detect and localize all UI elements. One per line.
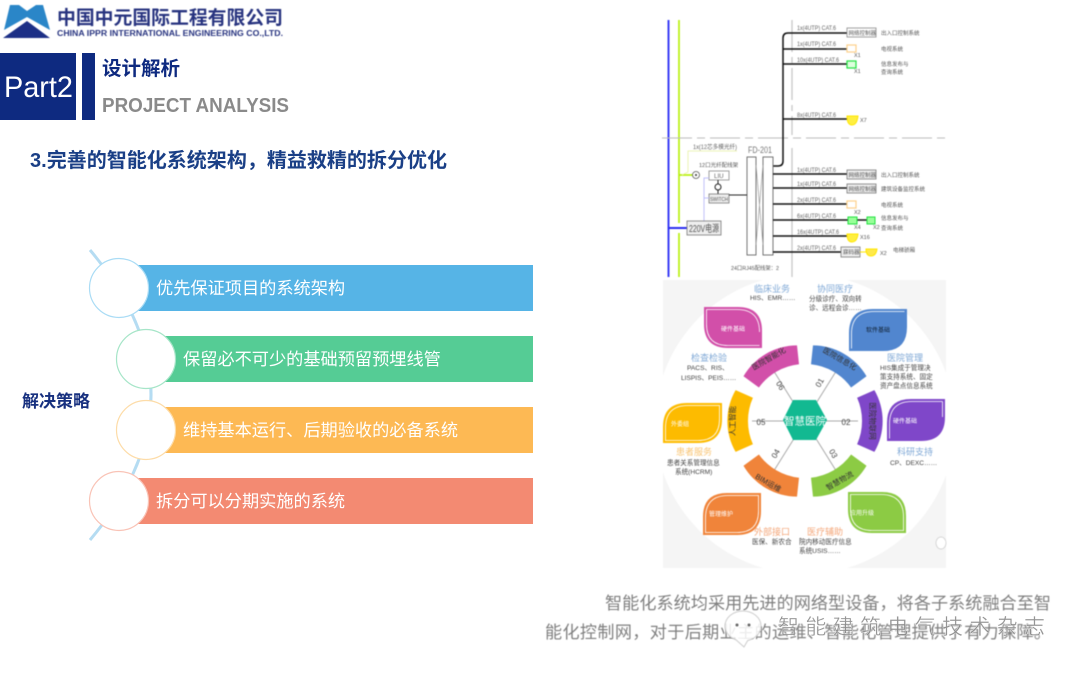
section badge: Part2 [0,53,95,120]
label: examination: LISPIS、PEIS…… [681,375,736,382]
leaf: management maintenance (orange): 管理维护 [709,510,733,518]
leaf: hardware base (magenta): 硬件基础 [721,325,745,333]
lower floor branch lines: 16x(4UTP) CAT.6 [797,229,839,236]
upper floor branch lines: X7 [860,118,867,124]
strategy item 3 [116,400,533,460]
label: hospital management: 资产盘点信息系统 [880,381,933,390]
lower floor branch lines: 电梯骄厢 [893,246,916,254]
lower floor branch lines: 电视系统 [881,201,904,209]
segment: artificial intelligence [727,390,753,452]
lower floor branch lines: 1x(4UTP) CAT.6 [797,167,836,174]
fibre, LIU, switch and power: LIU [714,173,724,180]
lower floor branch lines: X2 [854,210,861,216]
label: clinical business: 临床业务 [754,283,790,294]
leaf: maintenance (yellow) [663,403,722,443]
upper floor branch lines: 网络控制器 [848,29,877,37]
lower floor branch lines: X2 [873,225,880,231]
CAD riser diagram [662,20,946,277]
label: external interface: 外部接口 [754,526,790,537]
icon: small chat bubble [936,537,946,549]
upper floor branch lines: 查询系统 [881,68,904,76]
leaf: hardware base (purple) [887,399,945,441]
watermark: journal name: 智能建筑电气技术杂志 [778,616,1045,639]
label: hospital management: 医院管理 [887,352,923,363]
distribution frame FD-201 [731,145,779,272]
label: collaborative medicine: 协同医疗 [817,283,853,294]
upper floor branch lines: X1 [854,53,861,59]
label: examination [681,352,736,382]
label: research support: CP、DEXC…… [890,460,937,467]
lower floor branch lines: 建筑设备监控系统 [881,185,926,193]
lower floor branch lines: 网络控制器 [848,171,877,179]
label: research support [890,446,937,467]
label: clinical business: HIS、EMR…… [750,295,795,302]
logo English name: CHINA IPPR INTERNATIONAL ENGINEERING CO.,LTD. [57,28,283,38]
label: strategy: 解决策略 [22,391,90,411]
lower floor branch lines: 6x(4UTP) CAT.6 [797,213,836,220]
label: medical assistance [799,526,852,555]
leaf: software base (blue): 软件基础 [866,326,890,334]
upper floor branch lines: 1x(4UTP) CAT.6 [797,41,836,48]
leaf: software base (blue) [849,309,907,351]
description text: 智能化系统均采用先进的网络型设备，将各子系统融合至智 [605,594,1051,613]
center hexagon: 智慧医院 [784,414,826,428]
strategy item 2 [116,330,533,388]
fibre, LIU, switch and power: 1x(12芯多模光纤) [693,143,737,151]
lower floor branch lines: 信息发布与 [881,214,909,222]
fibre, LIU, switch and power: 12口光纤配线架 [699,161,739,169]
lower floor branch lines: 2x(4UTP) CAT.6 [797,245,836,252]
section title: Chinese: 设计解析 [102,58,180,80]
lower floor branch lines: X2 [880,251,887,257]
lower floor branch lines: 查询系统 [881,224,904,232]
heading: 3.完善的智能化系统架构，精益救精的拆分优化 [30,148,447,172]
leaf: hardware base (purple): 硬件基础 [893,417,917,425]
label: examination: PACS、RIS、 [687,365,729,372]
lower floor branch lines: 寐码器 [843,248,860,256]
lower floor branch lines: X16 [860,235,870,241]
distribution frame FD-201: FD-201 [748,145,772,155]
icon: logo mountain mark [3,5,50,38]
label: hospital management: 策支持系统、固定 [880,372,933,381]
leaf: application upgrade (green) [848,492,906,533]
segment: smart logistics [811,454,866,497]
logo: China IPPR [3,5,283,38]
segment: hospital informatization [811,345,866,388]
segment: hospital IoT [857,390,883,452]
strategy list [90,250,533,540]
label: medical assistance: 医疗辅助 [807,526,843,537]
spoke numbers [757,376,851,460]
segment: hospital IoT: 医院物联网 [868,402,878,440]
spoke numbers: 02 [842,418,851,427]
lower floor branch lines: 1x(4UTP) CAT.6 [797,181,836,188]
hub background [664,280,946,568]
fibre, LIU, switch and power: SWITCH [710,197,728,203]
strategy item 4 [90,472,533,530]
label: collaborative medicine: 诊、远程会诊…… [809,303,862,312]
grounding and power risers [662,20,946,277]
leaf: hardware base (magenta) [704,307,762,348]
description text: 能化控制网，对于后期业主的运维、智能化管理提供了有力保障。 [545,623,1051,642]
lower floor branch lines: 网络控制器 [848,185,877,193]
spoke numbers: 06 [774,380,787,392]
label: collaborative medicine [809,283,862,312]
segment: artificial intelligence: 人工智能 [727,406,737,436]
upper floor branch lines: 8x(4UTP) CAT.6 [797,112,836,119]
leaf: maintenance (yellow): 外委组 [671,420,689,428]
upper floor branch lines: 电视系统 [881,45,904,53]
spoke numbers: 03 [827,448,840,460]
lower floor branch lines: 出入口控制系统 [881,171,920,179]
segment: hospital intelligence [744,344,799,388]
label: external interface: 医保、新农合 [752,537,792,546]
section badge: Part2: Part2 [4,71,73,104]
strategy item 1: 优先保证项目的系统架构 [156,278,345,298]
label: examination: 检查检验 [691,352,727,363]
label: medical assistance: 院内移动医疗信息 [799,537,852,546]
upper floor branch lines: 1x(4UTP) CAT.6 [797,25,836,32]
spoke numbers: 01 [814,376,826,389]
label: external interface [752,526,792,546]
strategy item 2: 保留必不可少的基础预留预埋线管 [183,349,441,369]
upper floor branch lines: X1 [854,69,861,75]
smart hospital hub diagram [655,274,955,574]
spokes [752,365,858,477]
distribution frame FD-201: 24口RJ45配线架：2 [731,264,779,272]
label: clinical business [750,283,795,302]
lower floor branch lines [773,167,926,257]
center hexagon [783,400,827,440]
fibre, LIU, switch and power [682,143,747,235]
leaf: management maintenance (orange) [703,493,761,535]
label: medical assistance: 系统USIS…… [799,546,841,555]
logo Chinese name: 中国中元国际工程有限公司 [57,7,283,28]
strategy item 3: 维持基本运行、后期验收的必备系统 [183,420,458,440]
label: hospital management: HIS集成于管理决 [880,363,931,372]
label: patient service [667,446,720,476]
connecting arc [90,250,151,540]
watermark: WeChat icon [725,611,761,647]
upper floor branch lines: 出入口控制系统 [881,29,920,37]
segment: hospital intelligence: 医院智能化 [750,344,788,372]
fibre, LIU, switch and power: 220V电源 [689,222,719,235]
spoke numbers: 04 [770,447,782,460]
segment: BIM operations: BIM运维 [754,471,784,494]
label: patient service: 患者关系管理信息 [667,458,720,467]
label: hospital management [880,352,933,390]
section title: English: PROJECT ANALYSIS [102,94,289,117]
description text [545,594,1051,642]
label: research support: 科研支持 [897,446,933,457]
strategy item 4: 拆分可以分期实施的系统 [156,491,345,511]
lower floor branch lines: X4 [854,225,861,231]
upper floor branch lines: 信息发布与 [881,60,909,68]
segment: hospital informatization: 医院信息化 [821,345,859,372]
upper floor branch lines [773,25,920,166]
upper floor branch lines: 10x(4UTP) CAT.6 [797,57,839,64]
spoke numbers: 05 [757,418,766,427]
label: patient service: 系统(HCRM) [675,467,712,476]
leaf: application upgrade (green): 应用升级 [850,509,874,517]
lower floor branch lines: 2x(4UTP) CAT.6 [797,197,836,204]
segment: BIM operations [744,454,799,497]
segment: smart logistics: 智慧物流 [824,468,855,492]
label: patient service: 患者服务 [676,446,712,457]
label: collaborative medicine: 分级诊疗、双向转 [809,294,862,303]
strategy item 1 [90,258,533,318]
